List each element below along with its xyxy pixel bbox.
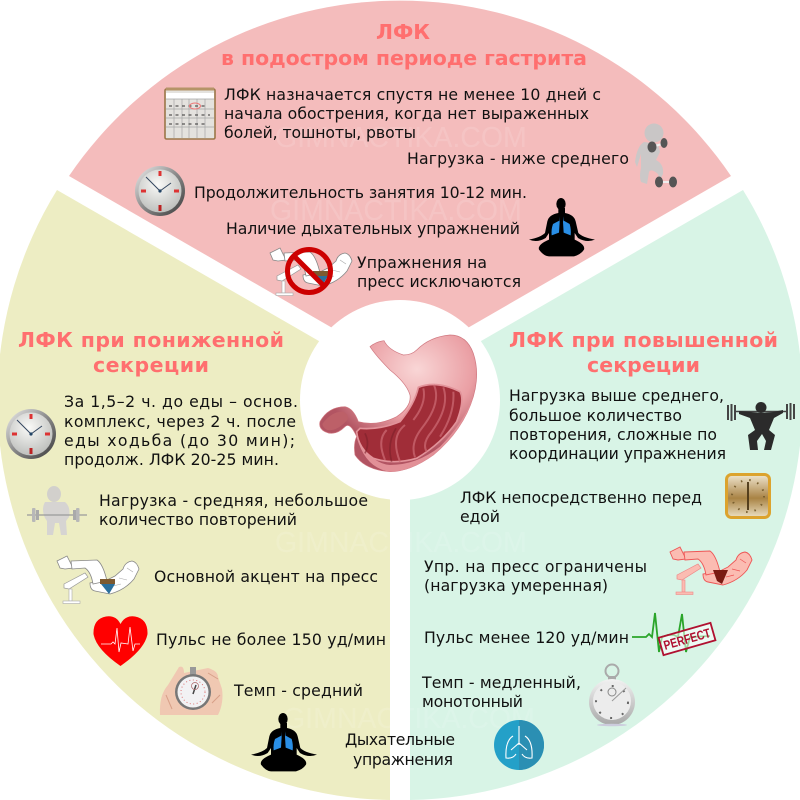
text block: high secretion load: Нагрузка выше среднего, <box>509 386 724 405</box>
text block: timing of exercise start: начала обострения, когда нет выраженных <box>224 104 589 123</box>
text block: high secretion load: большое количество <box>509 406 682 425</box>
text: sit-ups limited: (нагрузка умеренная) <box>424 576 608 595</box>
icon: calendar <box>165 89 215 139</box>
text: right before meal: едой <box>460 507 500 526</box>
icon: sit-up on bench <box>57 556 139 604</box>
icon: ECG line with stamp: PERFECT <box>662 625 712 653</box>
title: left sector: секреции <box>93 353 209 377</box>
text block: low secretion timing: еды ходьба (до 30 мин); <box>64 431 295 450</box>
text: slow tempo <box>421 673 581 711</box>
title: top sector: ЛФК <box>376 20 430 44</box>
text: breathing exercises <box>345 730 455 769</box>
text: medium tempo: Темп - средний <box>233 681 363 700</box>
text: breathing exercises: Дыхательные <box>345 730 455 749</box>
icon: ECG line with stamp <box>632 613 715 655</box>
panel: top pink sector <box>69 1 731 367</box>
text: session length: Продолжительность занятия 10-12 мин. <box>194 183 527 202</box>
icon: figure with dumbbells <box>635 124 677 188</box>
icon: wall clock left <box>6 409 56 459</box>
text: sit-ups excluded: Упражнения на <box>357 253 487 272</box>
panel: central white circle <box>300 300 500 500</box>
text block: high secretion load: повторения, сложные по <box>509 425 717 444</box>
text: slow tempo: Темп - медленный, <box>421 673 581 692</box>
icon: prohibited sit-ups <box>270 248 352 296</box>
text: breathing exercises: упражнения <box>353 750 453 769</box>
text: sit-ups limited: Упр. на пресс ограничены <box>424 557 647 576</box>
title: right sector <box>509 328 778 377</box>
text block: low secretion timing: комплекс, через 2 ч. после <box>64 412 296 431</box>
icon: gold clock <box>726 474 770 518</box>
icon: meditating figure with lungs <box>529 198 595 256</box>
text: focus on abs: Основной акцент на пресс <box>154 567 378 586</box>
icon: wall clock <box>135 166 185 216</box>
title: right sector: ЛФК при повышенной <box>509 328 778 352</box>
text block: timing of exercise start: болей, тошноты, рвоты <box>224 123 416 142</box>
text block: timing of exercise start: ЛФК назначается спустя не менее 10 дней с <box>224 85 601 104</box>
icon: silver stopwatch <box>589 664 635 726</box>
watermarks: GIMNACTIKA.COM <box>275 527 527 559</box>
title: left sector: ЛФК при пониженной <box>18 328 284 352</box>
text: sit-ups excluded <box>357 253 521 291</box>
watermarks: GIMNACTIKA.COM <box>270 195 522 227</box>
watermarks <box>270 122 535 735</box>
text: medium load: количество повторений <box>99 510 297 529</box>
text block: timing of exercise start <box>224 85 601 142</box>
icon: black weightlifter <box>728 402 794 450</box>
text: pulse under 120: Пульс менее 120 уд/мин <box>424 628 629 647</box>
icon: heart with pulse <box>93 616 148 666</box>
text block: low secretion timing <box>64 392 298 469</box>
text: pulse limit 150: Пульс не более 150 уд/мин <box>156 630 386 649</box>
text block: low secretion timing: продолж. ЛФК 20-25 мин. <box>64 450 279 469</box>
icon: figure with barbell <box>27 486 87 535</box>
text block: high secretion load: координации упражнения <box>509 444 726 463</box>
panel: right green sector <box>410 190 800 800</box>
text: right before meal <box>460 488 702 526</box>
title: right sector: секреции <box>587 353 700 377</box>
watermarks: GIMNACTIKA.COM <box>283 703 535 735</box>
icon: hand holding stopwatch <box>160 667 222 715</box>
text: breathing exercises present: Наличие дыхательных упражнений <box>226 219 520 238</box>
title: left sector <box>18 328 284 377</box>
text: sit-ups limited <box>424 557 647 595</box>
icon: red sit-up <box>670 547 752 594</box>
text block: high secretion load <box>509 386 726 463</box>
text: medium load <box>99 491 368 529</box>
illustration: stomach cross-section <box>320 335 477 472</box>
text: slow tempo: монотонный <box>422 692 523 711</box>
watermarks: GIMNACTIKA.COM <box>275 122 527 154</box>
icon: lungs in blue circle <box>494 720 544 770</box>
icon: meditating figure bottom <box>251 713 317 771</box>
text: sit-ups excluded: пресс исключаются <box>357 272 521 291</box>
title: top sector <box>221 20 587 70</box>
panel: left yellow sector <box>0 190 390 800</box>
title: top sector: в подостром периоде гастрита <box>221 46 587 70</box>
text: right before meal: ЛФК непосредственно перед <box>460 488 702 507</box>
text: load below average: Нагрузка - ниже среднего <box>407 149 629 168</box>
text: medium load: Нагрузка - средняя, небольшое <box>99 491 368 510</box>
text block: low secretion timing: За 1,5–2 ч. до еды – основ. <box>64 392 298 411</box>
